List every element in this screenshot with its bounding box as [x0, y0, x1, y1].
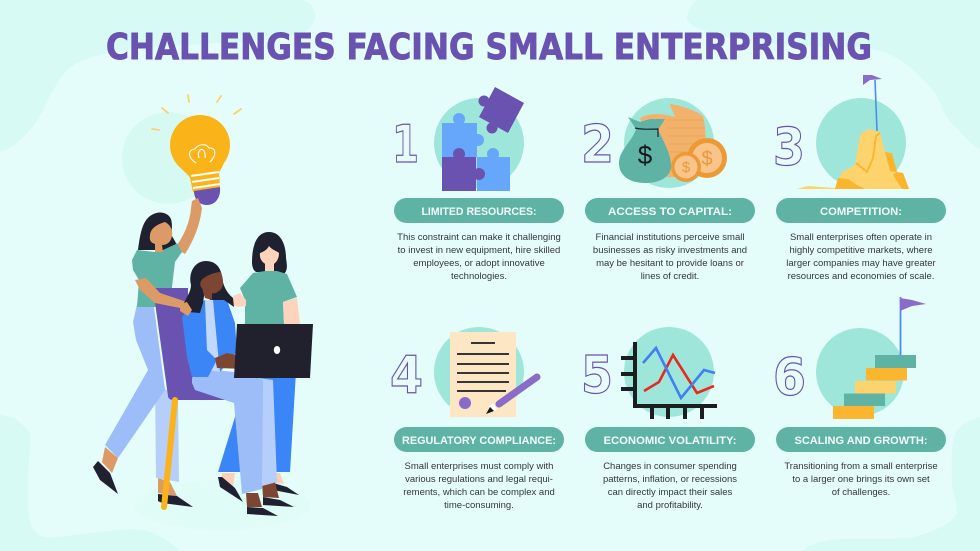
legs [258, 378, 277, 486]
text [603, 461, 737, 511]
text: various regulations and legal requi- [405, 474, 553, 485]
text: and profitability. [637, 500, 703, 511]
icon: money bag and coins: $ [682, 159, 691, 176]
text: highly competitive markets, where [789, 245, 933, 256]
number 5: 5 [581, 346, 613, 406]
text: rements, which can be complex and [403, 487, 555, 498]
text: to invest in new equipment, hire skilled [398, 245, 560, 256]
text: Small enterprises must comply with [405, 461, 553, 472]
heading pill: ECONOMIC VOLATILITY: [604, 435, 736, 447]
raised arm [175, 198, 202, 254]
ground shadow [134, 480, 310, 530]
text: resources and economies of scale. [788, 271, 934, 282]
face [260, 246, 279, 265]
text: to a larger one brings its own set [792, 474, 930, 485]
hand [215, 353, 248, 369]
text: employees, or adopt innovative [413, 258, 545, 269]
feet [222, 473, 235, 487]
text: of challenges. [832, 487, 890, 498]
icon: money bag and coins: $ [701, 148, 713, 170]
number 6: 6 [773, 348, 806, 408]
heading pill: SCALING AND GROWTH: [794, 435, 928, 447]
icon: document and pen [434, 327, 537, 417]
heading pill [585, 198, 755, 223]
heading pill [776, 198, 946, 223]
icon: puzzle [434, 87, 524, 191]
text: businesses as risky investments and [593, 245, 747, 256]
text: Financial institutions perceive small [596, 232, 744, 243]
text [786, 232, 936, 282]
trousers [218, 322, 299, 472]
icon: stairs with flag [816, 297, 926, 419]
heading pill: LIMITED RESOURCES: [422, 206, 536, 218]
text [784, 461, 938, 498]
panel 5: economic volatility [581, 327, 755, 511]
face [150, 222, 172, 252]
title: CHALLENGES FACING SMALL ENTERPRISING [106, 27, 872, 68]
person: right woman [218, 232, 300, 502]
text: can directly impact their sales [608, 487, 733, 498]
text: time-consuming. [444, 500, 514, 511]
icon: mountain with flag [797, 75, 909, 189]
panel 6: scaling and growth [773, 297, 946, 498]
text: larger companies may have greater [786, 258, 936, 269]
text: lines of credit. [641, 271, 699, 282]
panel 4: regulatory compliance [390, 327, 564, 511]
text: patterns, inflation, or recessions [603, 474, 737, 485]
torso [132, 243, 182, 307]
heading pill [776, 427, 946, 452]
text [593, 232, 747, 282]
shirt [240, 271, 297, 325]
heading pill [585, 427, 755, 452]
text: Changes in consumer spending [603, 461, 737, 472]
number 4: 4 [390, 346, 423, 406]
heading pill: REGULATORY COMPLIANCE: [402, 435, 556, 447]
text: technologies. [451, 271, 507, 282]
hair [182, 261, 234, 313]
hair [252, 232, 287, 274]
feet [102, 447, 118, 473]
laptop [234, 324, 313, 378]
pale circle behind bulb [122, 112, 214, 204]
text: Small enterprises often operate in [790, 232, 932, 243]
icon: light bulb [152, 95, 241, 205]
hair [138, 212, 176, 250]
heading pill [394, 198, 564, 223]
panel 3: competition [773, 75, 946, 282]
legs [155, 385, 179, 482]
person: seated woman [182, 261, 294, 516]
text [403, 461, 555, 511]
icon: line chart [621, 327, 717, 419]
person: left woman [93, 198, 202, 507]
panel 1: limited resources [392, 87, 564, 282]
text [397, 232, 561, 282]
shirt [205, 300, 220, 372]
icon: money bag and coins [619, 98, 727, 188]
jacket [182, 300, 217, 377]
heading pill [394, 427, 564, 452]
text: Transitioning from a small enterprise [784, 461, 938, 472]
heading pill: COMPETITION: [820, 206, 902, 218]
panel 2: access to capital [581, 98, 755, 282]
feet [246, 493, 262, 507]
number 3: 3 [773, 118, 805, 178]
text: This constraint can make it challenging [397, 232, 561, 243]
number 1: 1 [392, 115, 419, 175]
left woman's lower arm [135, 278, 192, 316]
face [200, 272, 223, 300]
chair [153, 288, 235, 507]
illustration: team with light bulb [93, 95, 313, 530]
number 2: 2 [581, 115, 614, 175]
icon: money bag and coins: $ [638, 140, 653, 170]
text: may be hesitant to provide loans or [596, 258, 744, 269]
arms [283, 298, 300, 324]
heading pill: ACCESS TO CAPITAL: [608, 206, 732, 218]
left woman's hand [180, 302, 192, 316]
